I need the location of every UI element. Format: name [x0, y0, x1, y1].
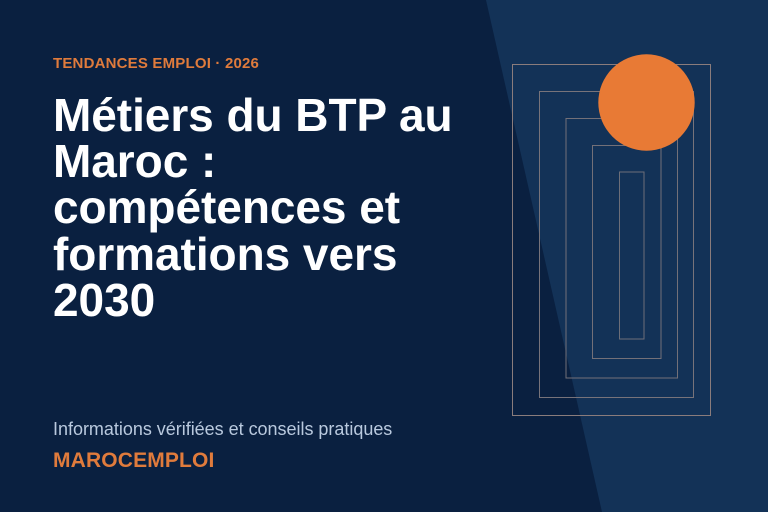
brand name: MAROCEMPLOI	[53, 449, 214, 472]
title: 2030	[53, 274, 155, 326]
title: formations vers	[53, 228, 397, 280]
title	[53, 89, 453, 326]
title: compétences et	[53, 181, 400, 233]
eyebrow label: TENDANCES EMPLOI · 2026	[53, 55, 259, 72]
concentric rectangles	[512, 64, 710, 416]
icon: orange circle	[598, 54, 695, 151]
subtitle: Informations vérifiées et conseils pratiques	[53, 419, 392, 439]
title: Maroc :	[53, 135, 216, 187]
panel: diagonal lighter background	[486, 0, 768, 512]
title: Métiers du BTP au	[53, 89, 453, 141]
